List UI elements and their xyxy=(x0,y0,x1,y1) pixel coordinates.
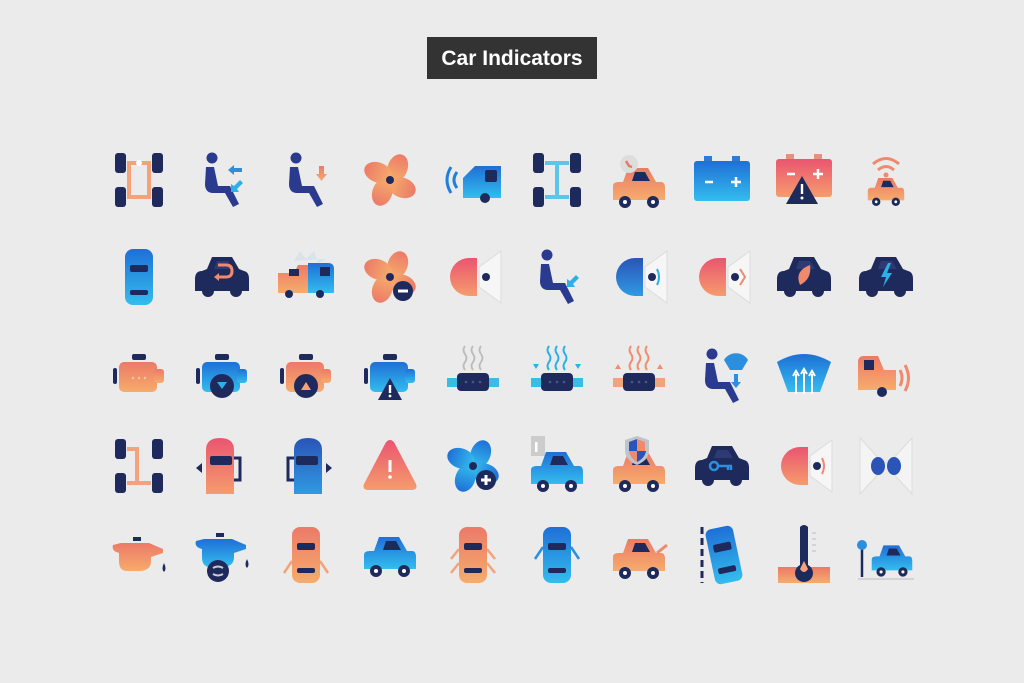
icon: seat defrost xyxy=(705,348,748,403)
icon: headlight red arrows xyxy=(699,251,750,303)
icon: electric car xyxy=(859,257,913,297)
icon: heater orange xyxy=(613,346,665,391)
icon: car key xyxy=(695,446,749,486)
icon: heater blue xyxy=(531,346,583,391)
icon: headlight blue xyxy=(616,251,667,303)
icon: battery xyxy=(694,156,750,201)
icon: warning triangle xyxy=(364,440,416,490)
icon: parking xyxy=(857,540,914,579)
icon: headlight red 2 xyxy=(781,440,832,492)
icon: top view doors blue xyxy=(535,527,579,583)
icon: car manual xyxy=(531,436,583,492)
icon: seat arrow xyxy=(540,250,579,304)
icon: car top blue xyxy=(125,249,153,305)
icon: engine warning xyxy=(364,354,415,400)
icon: top view doors open orange xyxy=(284,527,328,583)
icon: blue car side xyxy=(364,537,416,577)
icon grid xyxy=(113,151,914,585)
icon: headlight red xyxy=(450,251,501,303)
icon: fan minus xyxy=(361,248,419,306)
icon: eco car xyxy=(777,257,831,297)
icon: heater grey xyxy=(447,346,499,391)
icon: car insurance xyxy=(613,436,665,492)
icon: fan plus xyxy=(444,437,502,495)
icon: oil can xyxy=(113,537,166,572)
icon: car recirculation xyxy=(195,257,249,297)
title xyxy=(427,37,597,79)
icon: 4wd chassis xyxy=(115,153,163,207)
icon: seat down xyxy=(289,152,327,207)
icon: fog lights xyxy=(860,438,912,494)
icon: top view doors orange xyxy=(451,527,495,583)
icon: thermometer xyxy=(778,525,830,583)
icon: lane car xyxy=(702,525,744,585)
icon: chassis rear xyxy=(115,439,163,493)
icon: windshield defrost xyxy=(777,354,831,394)
icon: collision xyxy=(278,251,334,298)
icon: engine down xyxy=(196,354,247,398)
icon: engine up xyxy=(280,354,331,398)
icon: door red xyxy=(196,438,240,494)
icon: connected car xyxy=(868,158,904,206)
icon: door blue xyxy=(288,438,332,494)
icon: battery warning xyxy=(776,154,832,204)
icon: car phone xyxy=(613,155,665,208)
icon: engine xyxy=(113,354,164,392)
icon: oil can blue xyxy=(196,533,248,582)
icon: 2wd chassis xyxy=(533,153,581,207)
title: Car Indicators xyxy=(441,47,583,70)
icon: seat adjust xyxy=(205,152,243,207)
icon: rear sensor xyxy=(858,356,908,397)
icon: fan xyxy=(361,151,419,209)
icon: van sensor xyxy=(447,166,501,203)
icon: hood open xyxy=(613,539,667,579)
